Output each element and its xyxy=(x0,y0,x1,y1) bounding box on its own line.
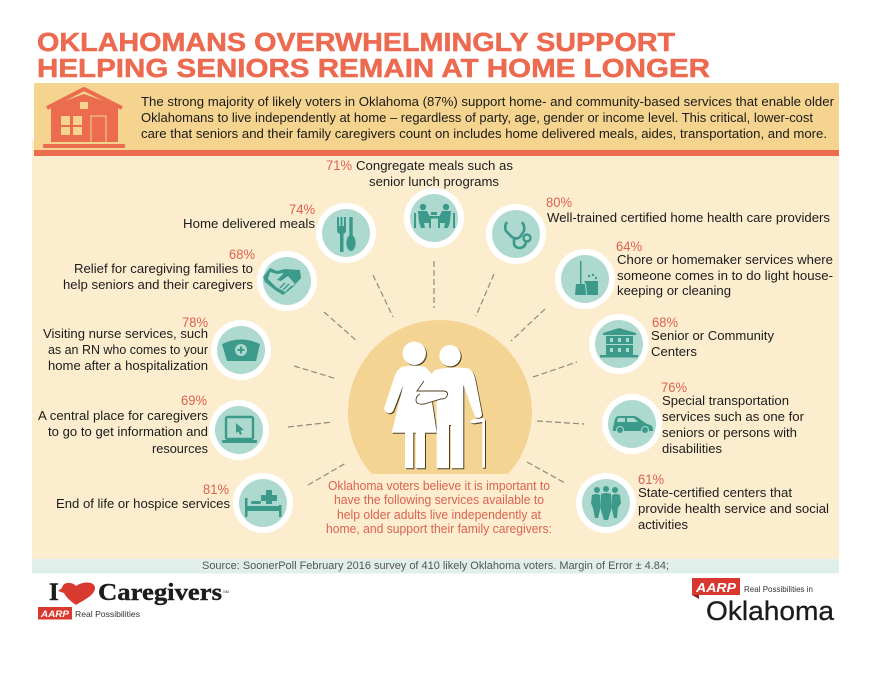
icon: stethoscope xyxy=(505,222,530,248)
item: senior or community centers xyxy=(589,314,774,374)
logo: I love Caregivers: Caregivers xyxy=(98,580,222,606)
item: end of life or hospice: End of life or hospice services xyxy=(56,496,230,511)
title xyxy=(37,29,710,83)
red divider bar xyxy=(34,150,839,156)
linked arms xyxy=(416,381,448,404)
icon: heart xyxy=(58,582,95,605)
callout: centre statement: Oklahoma voters believe it is important to xyxy=(328,479,550,493)
item: congregate meals xyxy=(326,158,513,248)
logo: I love Caregivers: SM xyxy=(223,589,229,594)
icon: nurse cap xyxy=(222,340,260,361)
icon: senior couple xyxy=(384,342,485,468)
item: stethoscope providers xyxy=(486,195,830,264)
panel: intro banner xyxy=(34,83,839,150)
item: senior or community centers: Centers xyxy=(651,344,697,359)
icon: handshake xyxy=(263,268,301,295)
intro text: care that seniors and their family caregivers count on includes home delivered meals, aides, transportation, and more. xyxy=(141,127,827,141)
logo: I love Caregivers: I xyxy=(49,579,59,606)
item: chore services: someone comes in to do light house- xyxy=(617,268,833,283)
logo: AARP Oklahoma: AARP xyxy=(695,580,736,595)
icon: broom and bucket xyxy=(575,261,598,295)
item: relief for caregiving families: help seniors and their caregivers xyxy=(63,277,253,292)
dashed connector lines xyxy=(288,261,584,485)
title: OKLAHOMANS OVERWHELMINGLY SUPPORT xyxy=(37,29,675,57)
item: state-certified centers xyxy=(576,472,829,533)
item: state-certified centers: provide health service and social xyxy=(638,501,829,516)
item: special transportation: disabilities xyxy=(662,441,722,456)
item: state-certified centers: activities xyxy=(638,517,688,532)
item: home delivered meals: 74% xyxy=(289,202,315,217)
item: stethoscope providers: Well-trained certified home health care providers xyxy=(547,210,830,225)
source bar xyxy=(32,559,839,574)
item: end of life or hospice xyxy=(56,473,293,533)
item: central place for caregivers: 69% xyxy=(181,393,207,408)
item: chore services: Chore or homemaker services where xyxy=(617,252,833,267)
logo: AARP Oklahoma: Oklahoma xyxy=(706,596,835,626)
item: senior or community centers: 68% xyxy=(652,315,678,330)
intro text: The strong majority of likely voters in Oklahoma (87%) support home- and community-based services that enable older xyxy=(141,95,834,109)
callout: centre statement xyxy=(326,479,552,536)
item: senior or community centers: Senior or Community xyxy=(651,328,774,343)
item: visiting nurse xyxy=(43,315,271,380)
intro text: Oklahomans to live independently at home – regardless of party, age, gender or income level. This critical, lower-cost xyxy=(141,111,814,125)
item: chore services xyxy=(555,239,833,309)
icon: people at table xyxy=(414,204,455,228)
icon: van xyxy=(613,416,653,434)
item: visiting nurse: as an RN who comes to your xyxy=(48,342,209,357)
callout: centre statement: home, and support their family caregivers: xyxy=(326,522,552,536)
item: state-certified centers: 61% xyxy=(638,472,664,487)
item: stethoscope providers: 80% xyxy=(546,195,572,210)
item: special transportation: seniors or persons with xyxy=(662,425,797,440)
item: state-certified centers: State-certified centers that xyxy=(638,485,792,500)
title: HELPING SENIORS REMAIN AT HOME LONGER xyxy=(37,55,710,83)
item: central place for caregivers: to go to get information and xyxy=(48,424,208,439)
intro text xyxy=(141,95,834,141)
item: central place for caregivers: A central place for caregivers xyxy=(38,408,208,423)
item: visiting nurse: Visiting nurse services, such xyxy=(43,326,208,341)
item: chore services: 64% xyxy=(616,239,642,254)
item: special transportation: Special transportation xyxy=(662,393,789,408)
callout: centre statement: have the following services available to xyxy=(334,493,544,507)
item: central place for caregivers: resources xyxy=(152,441,208,456)
icon: building xyxy=(600,328,638,358)
item: congregate meals: senior lunch programs xyxy=(369,174,499,189)
logo: AARP Oklahoma: Real Possibilities in xyxy=(744,584,813,594)
item: relief for caregiving families xyxy=(63,247,317,311)
item: home delivered meals xyxy=(183,202,376,263)
item: special transportation: 76% xyxy=(661,380,687,395)
item: visiting nurse: home after a hospitalization xyxy=(48,358,208,373)
item: central place for caregivers xyxy=(38,393,269,460)
central circle with couple xyxy=(348,320,532,474)
icon: house xyxy=(43,89,125,148)
logo: I love Caregivers: AARP xyxy=(40,609,70,620)
item: relief for caregiving families: 68% xyxy=(229,247,255,262)
callout: centre statement: help older adults live independently at xyxy=(337,508,542,522)
item: special transportation: services such as one for xyxy=(662,409,805,424)
logo: I love Caregivers xyxy=(38,579,229,620)
icon: hospital bed xyxy=(245,490,282,517)
item: congregate meals: 71% xyxy=(326,158,352,173)
logo: AARP Oklahoma xyxy=(692,578,835,626)
item: chore services: keeping or cleaning xyxy=(617,283,731,298)
item: visiting nurse: 78% xyxy=(182,315,208,330)
item: home delivered meals: Home delivered meals xyxy=(183,216,315,231)
item: relief for caregiving families: Relief for caregiving families to xyxy=(74,261,253,276)
logo: I love Caregivers: Real Possibilities xyxy=(75,609,140,619)
item: end of life or hospice: 81% xyxy=(203,482,229,497)
panel: services background xyxy=(32,140,839,559)
icon: laptop xyxy=(222,417,257,443)
item: congregate meals: Congregate meals such as xyxy=(356,158,513,173)
source bar: Source: SoonerPoll February 2016 survey of 410 likely Oklahoma voters. Margin of Error ± 4.84; xyxy=(202,560,669,572)
icon: fork and spoon xyxy=(337,217,356,252)
icon: three people xyxy=(591,486,621,520)
item: special transportation xyxy=(602,380,805,456)
